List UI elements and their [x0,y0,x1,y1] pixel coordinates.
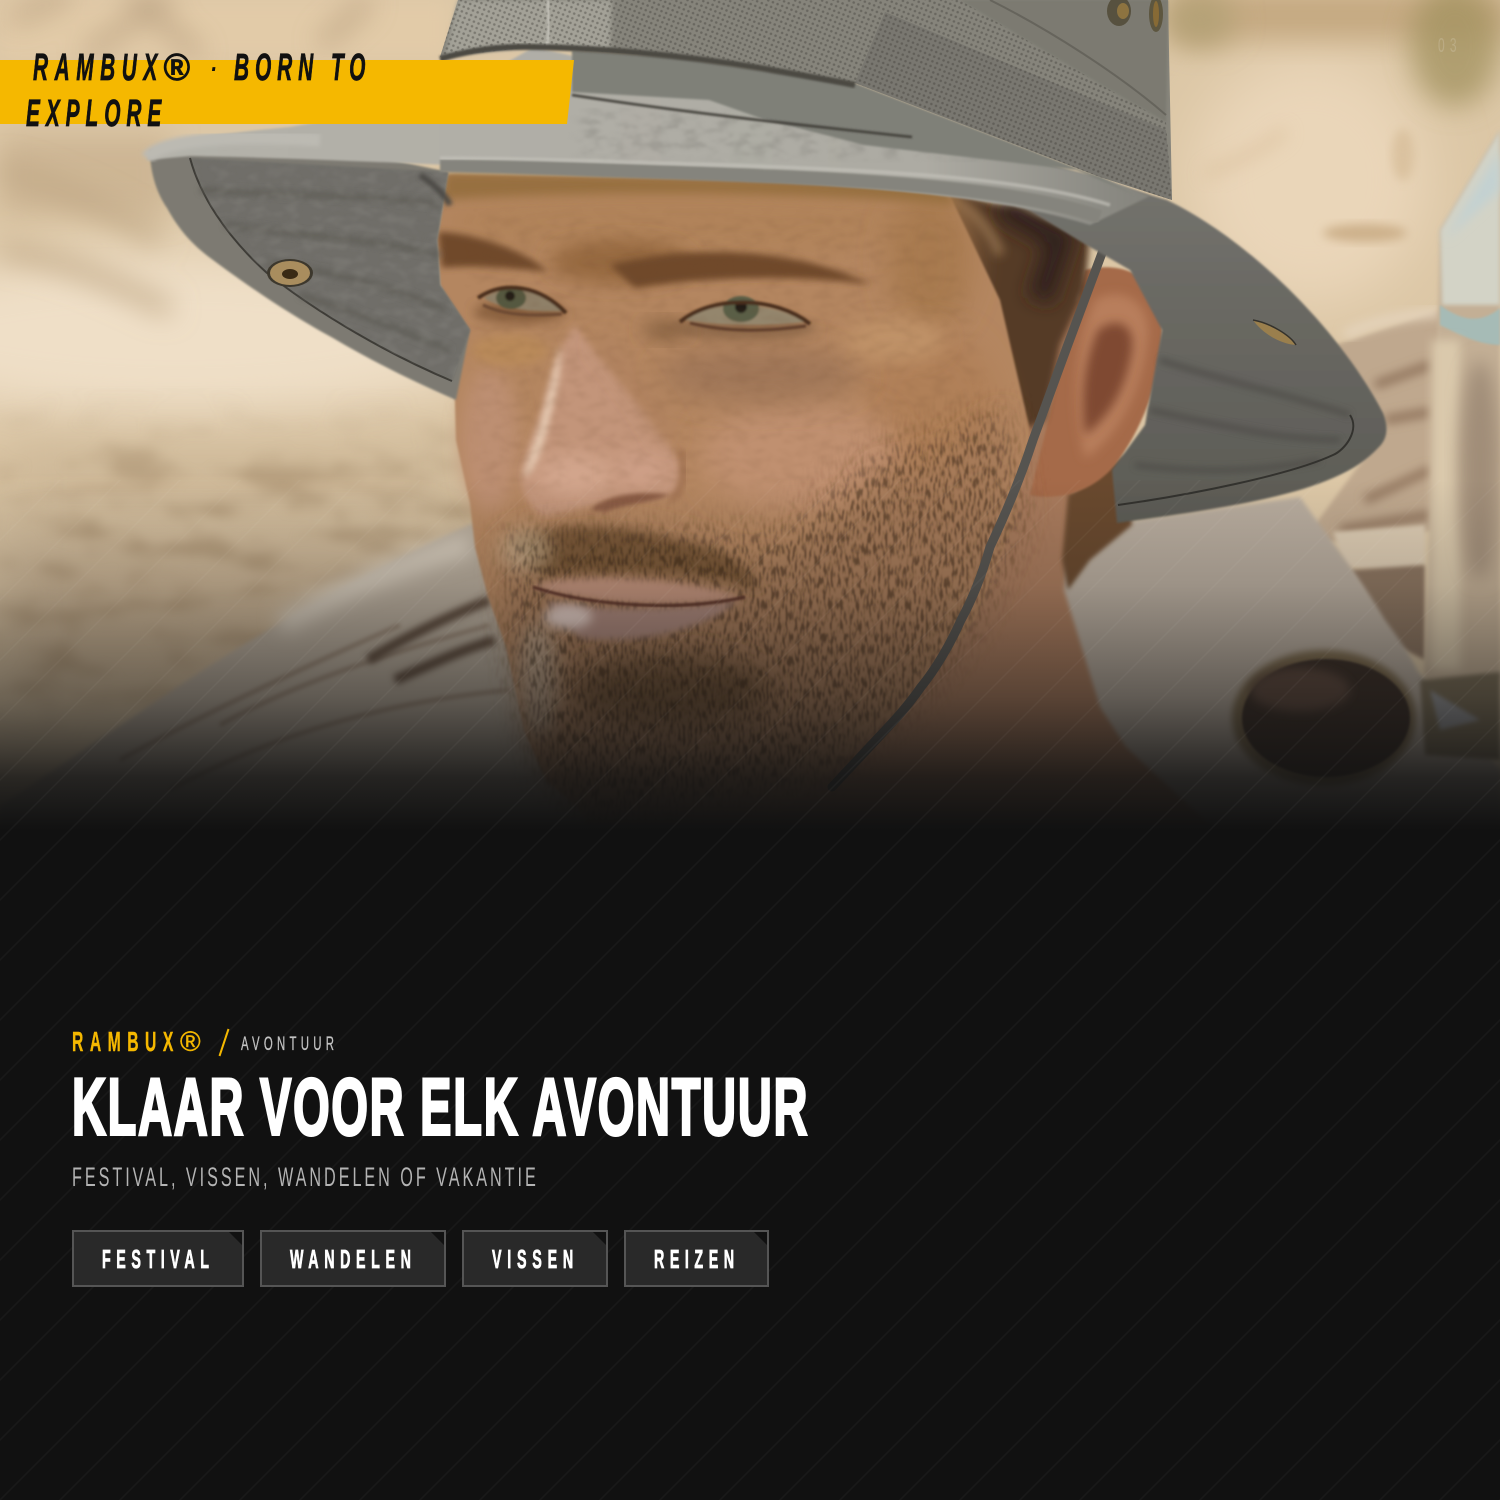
eyebrow line [72,1025,334,1057]
banner text: BORN TO [234,47,366,89]
crown stitch [990,0,1166,115]
subtitle: FESTIVAL, VISSEN, WANDELEN OF VAKANTIE [72,1162,536,1192]
skin texture [524,359,656,480]
lips [533,578,745,640]
sand background [0,0,1500,830]
brand name: RAMBUX [72,1025,173,1057]
eyes [478,287,810,330]
tag: vissen: VISSEN [492,1246,573,1274]
brim seam [572,95,912,137]
pale cloth behind shoulder [1063,496,1423,756]
banner text: ® [163,45,190,88]
brand name: ® [180,1026,201,1057]
ear [1030,267,1162,497]
tag row [73,1231,768,1286]
brim top surface [147,47,1150,225]
tag: wandelen [261,1231,445,1286]
fabric patches on brim [580,110,1050,160]
driftwood log, left [81,524,522,774]
eye sockets [474,300,566,324]
hat shadow on forehead [442,172,955,205]
band shadow [440,47,855,85]
category: AVONTUUR [241,1034,334,1055]
tag: festival [73,1231,243,1286]
side band [855,12,1172,200]
driftwood, right [1318,307,1439,660]
hair [950,196,1094,432]
eyebrows [438,232,872,288]
hero photo: man in grey hat on the beach [0,0,1500,830]
chin shadow [570,656,770,724]
brand banner [0,45,574,135]
hat [147,0,1387,523]
tag: reizen: REIZEN [654,1246,734,1274]
neck and shoulder [837,302,1152,784]
glass bottle [1424,130,1500,680]
stubble hairs [505,410,1025,825]
dark fade into panel [0,480,1500,830]
main heading: KLAAR VOOR ELK AVONTUUR [72,1062,807,1153]
moustache [510,526,760,590]
tag: wandelen: WANDELEN [290,1246,411,1274]
nose [520,325,683,517]
brim lip [147,138,1110,217]
faint slide number: 03 [1438,35,1457,57]
slash divider [220,1029,228,1056]
banner text: EXPLORE [26,93,162,135]
tag: vissen [463,1231,607,1286]
hair under ear [1062,455,1132,590]
banner text [26,45,366,135]
face [437,172,1030,830]
banner text: RAMBUX [33,47,158,89]
skin tones [440,186,920,258]
beard base shadow [512,435,1014,680]
banner text: · [210,55,217,84]
eyelets [267,0,1296,345]
brim surface, right side [1000,150,1387,523]
crown [440,0,1172,200]
chin strap cord [832,245,1105,787]
bright mesh [445,0,612,55]
tag: festival: FESTIVAL [102,1246,209,1274]
mesh texture [440,0,1172,200]
diagonal stripes overlay [0,480,1500,1500]
tag: reizen [625,1231,768,1286]
pale beard patches, left [499,528,558,738]
underside of brim, left [150,140,472,400]
smooth band under crown [572,50,1135,195]
smooth crown panel [960,0,1168,122]
sunglasses [1232,650,1500,786]
